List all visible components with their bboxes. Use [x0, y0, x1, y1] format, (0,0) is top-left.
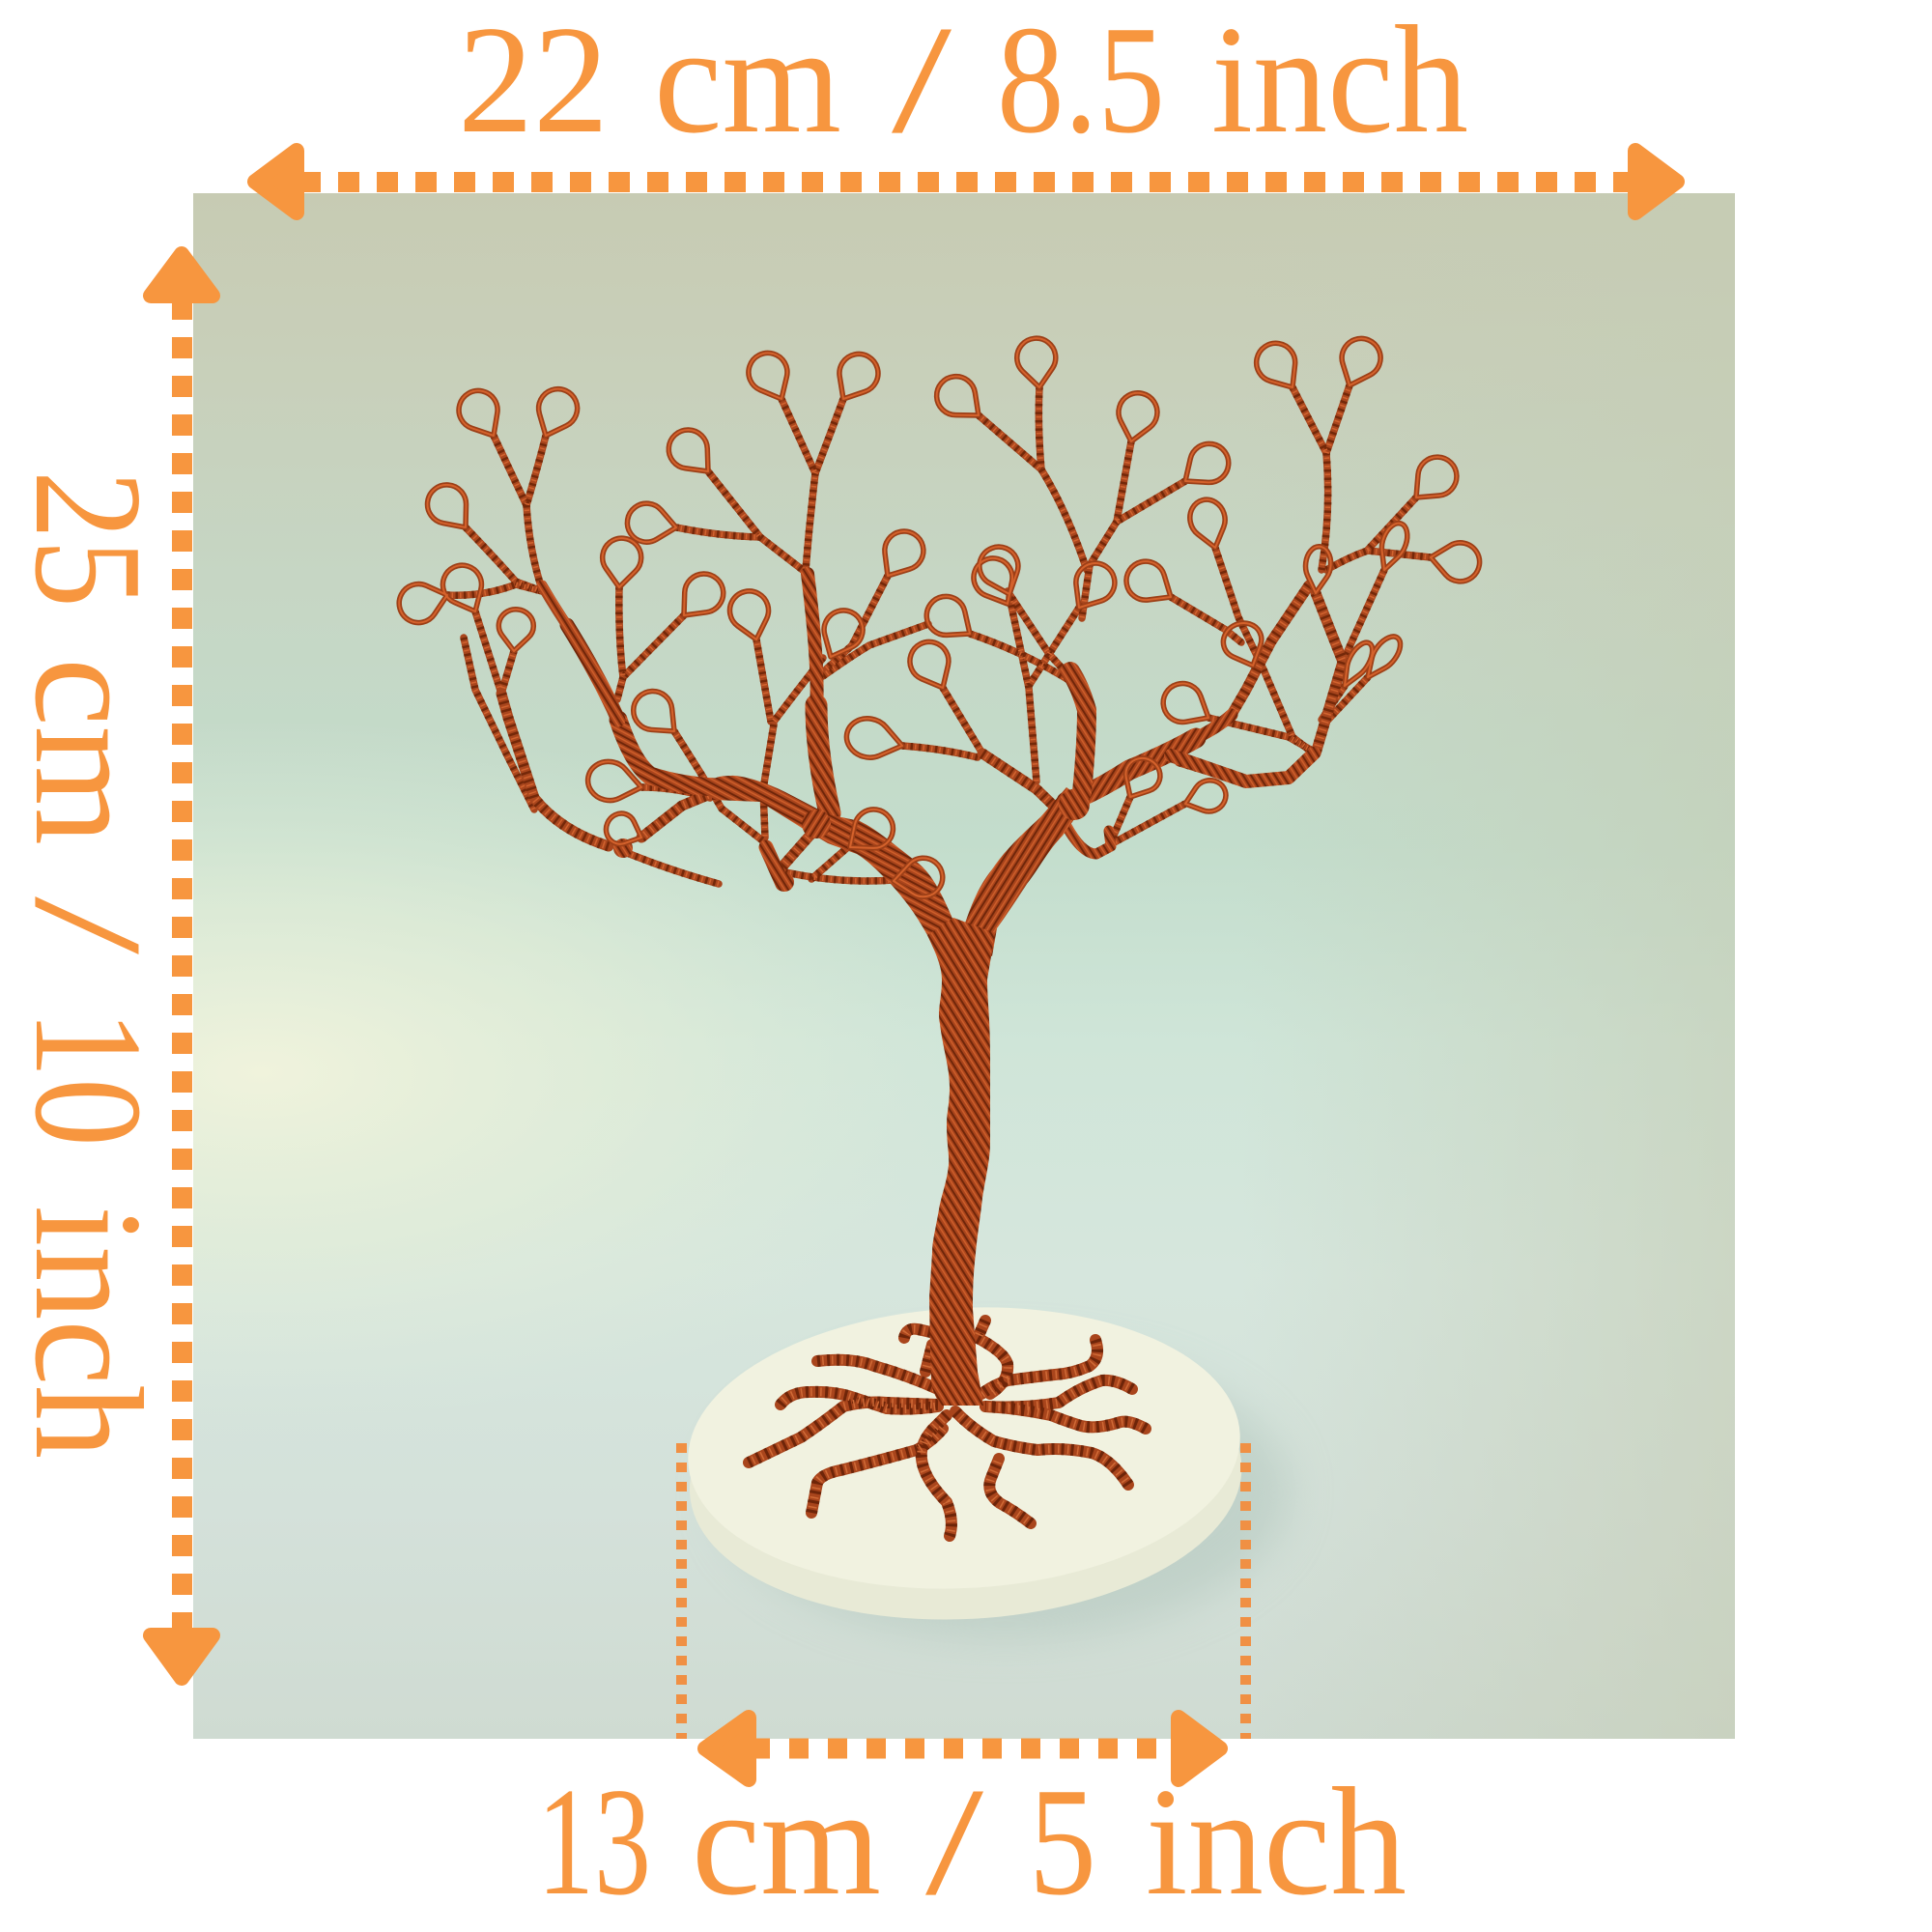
thick right limb and branches: [956, 671, 1314, 956]
disk base: [681, 1293, 1290, 1637]
photo panel background: [193, 193, 1735, 1739]
roots: [749, 1321, 1146, 1536]
heading: height 25 cm / 10 inch: 25: [3, 470, 175, 608]
heading: base 13 cm / 5 inch: 13: [537, 1755, 651, 1927]
dotted guide: base right edge: [1240, 1443, 1251, 1739]
heading: height 25 cm / 10 inch: /: [3, 896, 175, 955]
dotted guide: base left edge: [676, 1443, 687, 1739]
thick left limb and main left branch: [542, 574, 966, 966]
arrow: height dimension: [151, 254, 213, 1678]
heading: height 25 cm / 10 inch: 10: [3, 1009, 175, 1147]
trunk: [927, 918, 995, 1406]
heading: height 25 cm / 10 inch: cm: [3, 658, 175, 845]
heading: base 13 cm / 5 inch: 5: [1029, 1755, 1096, 1927]
medium branches: [501, 585, 1343, 867]
heading: base 13 cm / 5 inch: inch: [1146, 1755, 1406, 1927]
thin twisted branches: [447, 385, 1431, 884]
heading: base 13 cm / 5 inch: /: [925, 1755, 984, 1927]
arrow: base width dimension: [705, 1718, 1220, 1779]
heading: base 13 cm / 5 inch: cm: [692, 1755, 881, 1927]
heading: height 25 cm / 10 inch: inch: [3, 1206, 175, 1459]
wire loops: [394, 332, 1482, 900]
arrow: width dimension: [255, 151, 1677, 213]
